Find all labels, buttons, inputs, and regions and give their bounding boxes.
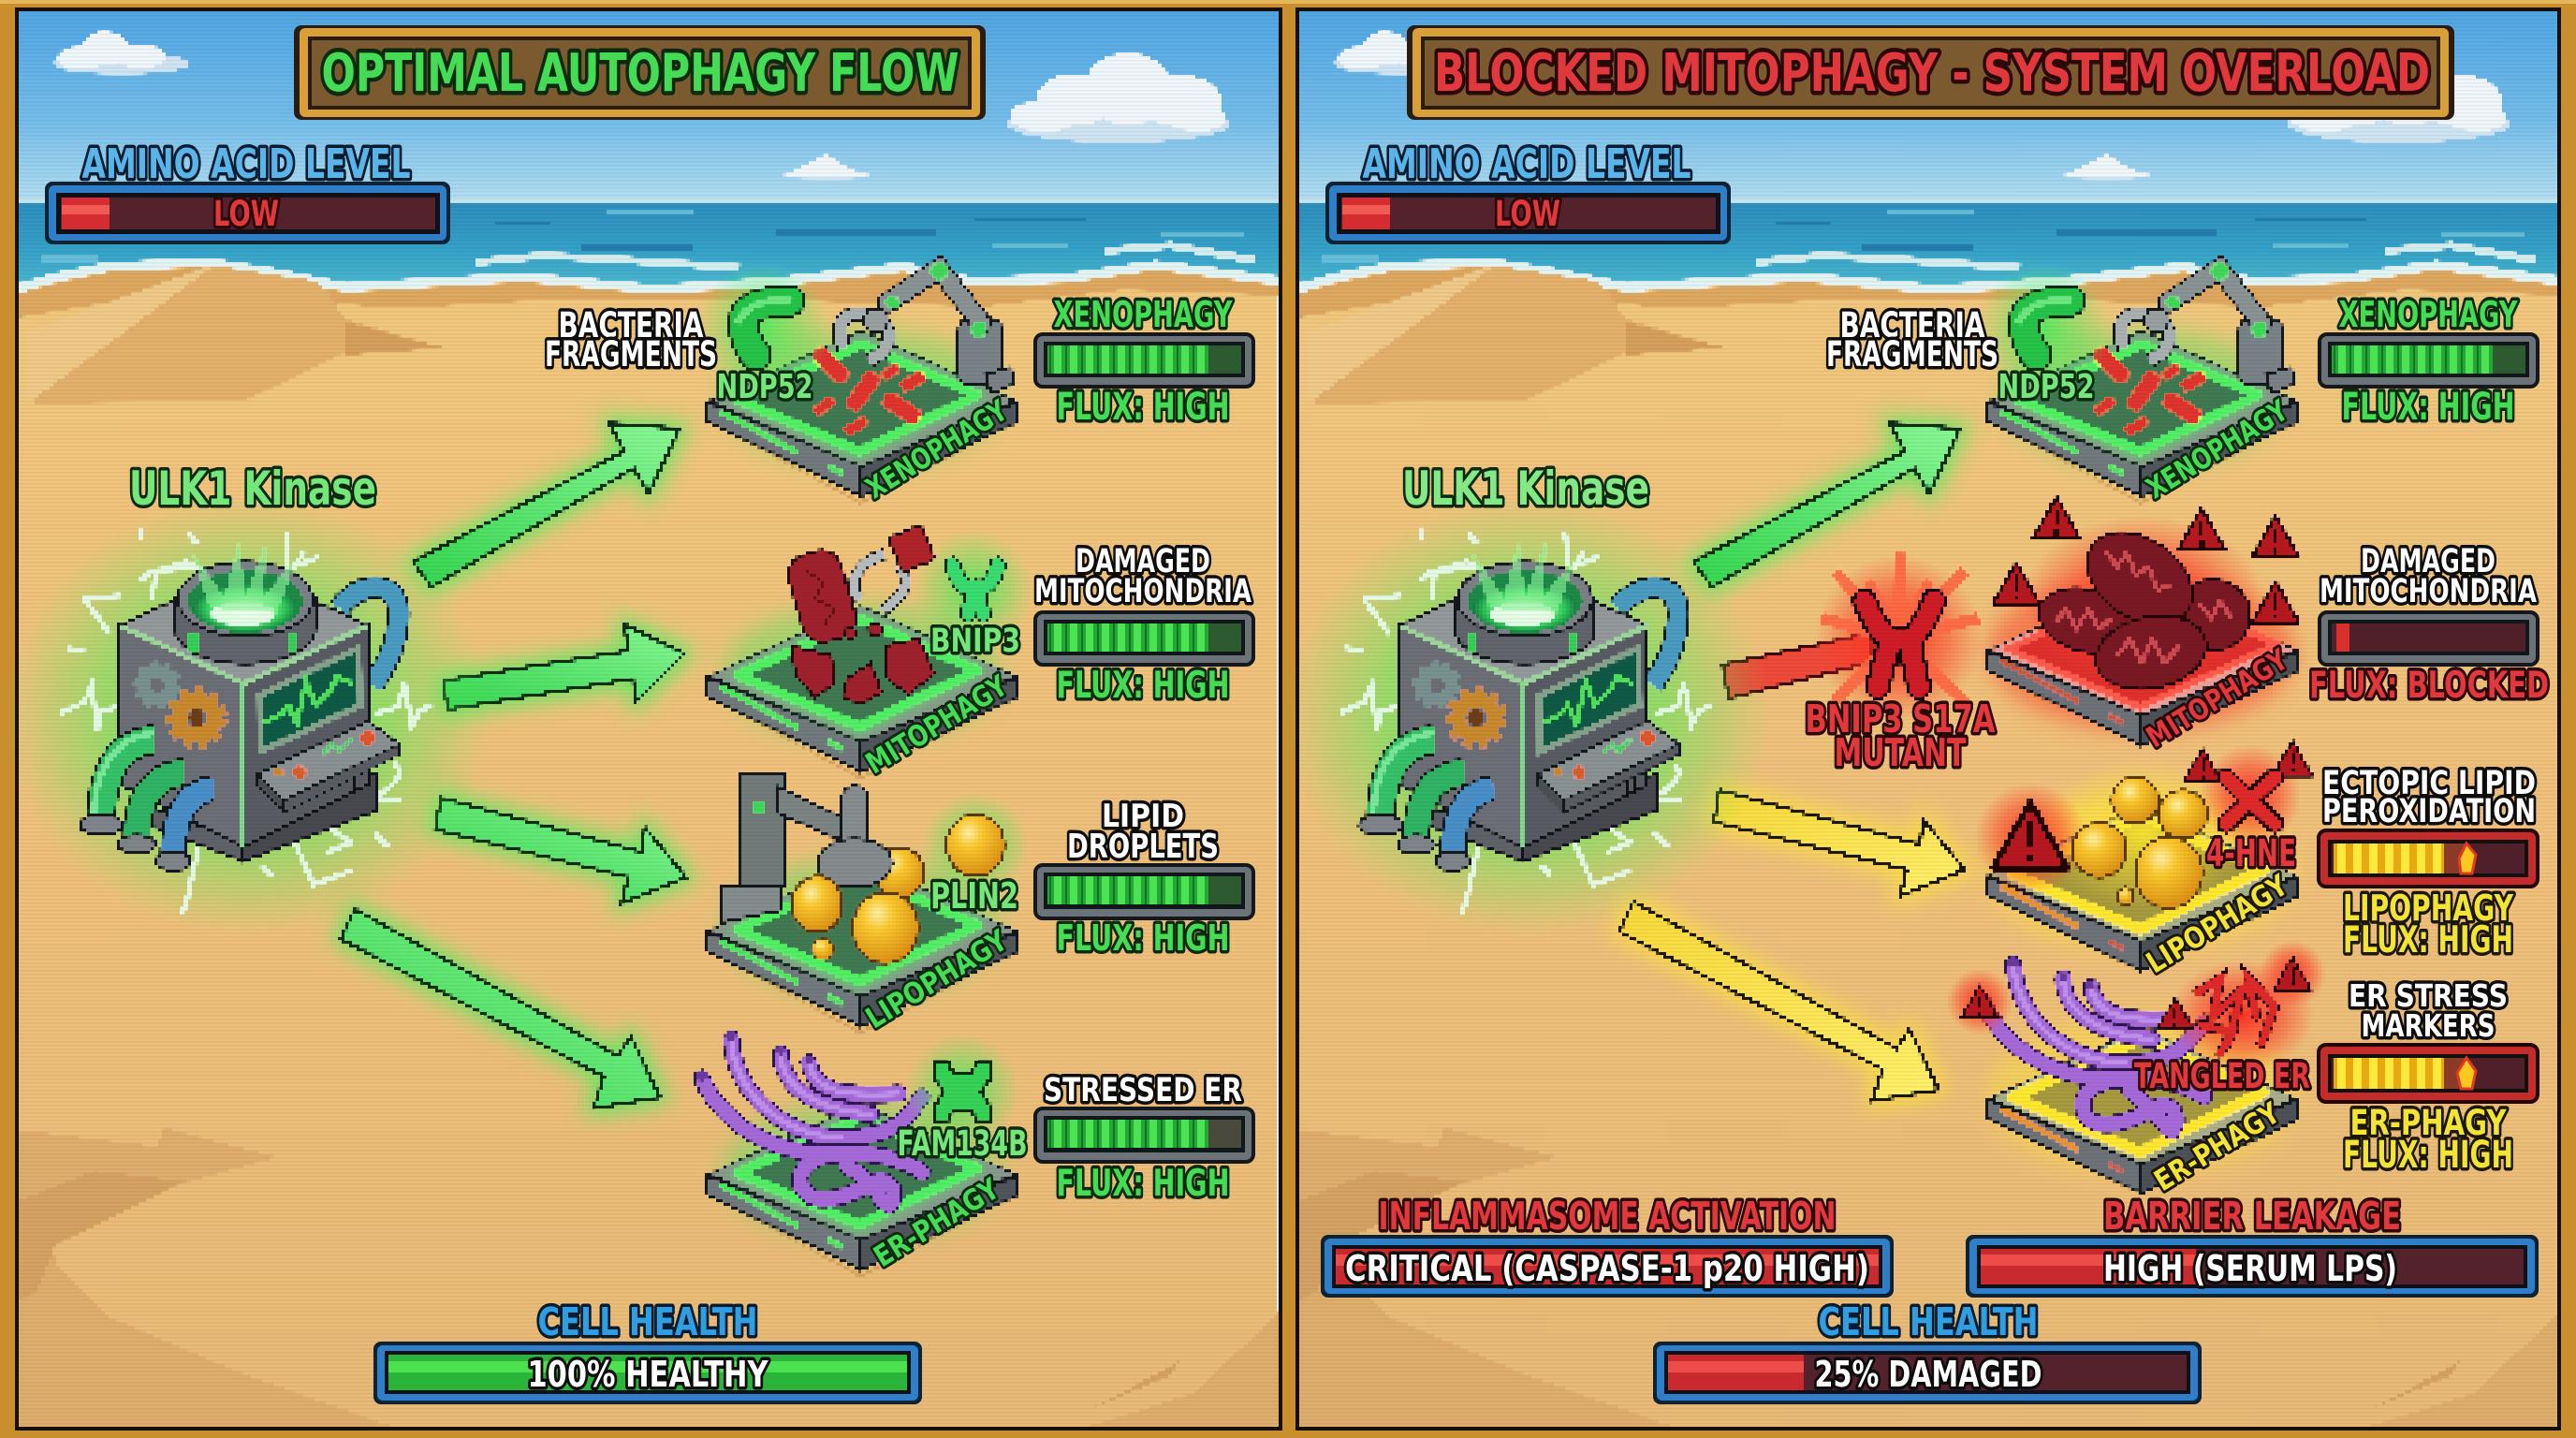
cell health xyxy=(1653,1299,2202,1404)
xenophagy labels: BACTERIA xyxy=(558,305,704,345)
xenophagy labels: FRAGMENTS xyxy=(1826,334,1998,374)
status: xenophagy: FLUX: HIGH xyxy=(1056,386,1230,429)
amino acid level: LOW xyxy=(213,194,279,234)
xenophagy labels xyxy=(1826,305,2294,506)
cell health: CELL HEALTH xyxy=(537,1299,758,1344)
status: mitophagy: DAMAGED xyxy=(1076,543,1210,580)
cell health: 25% DAMAGED xyxy=(1814,1354,2042,1395)
barrier leakage: BARRIER LEAKAGE xyxy=(2103,1194,2401,1239)
panel: blocked mitophagy xyxy=(1281,0,2561,1438)
mitophagy labels: BNIP3 xyxy=(930,623,1020,660)
amino acid level: AMINO ACID LEVEL xyxy=(1363,140,1690,188)
barrier leakage: HIGH (SERUM LPS) xyxy=(2103,1248,2397,1289)
status: er stress: ER-PHAGY xyxy=(2349,1103,2507,1143)
beach background left xyxy=(0,0,1281,1438)
right panel artwork xyxy=(1281,0,2561,1438)
lipophagy labels: LIPOPHAGY xyxy=(860,923,1014,1035)
ULK1 machine xyxy=(5,496,491,936)
status: er-phagy xyxy=(1035,1072,1253,1205)
xenophagy labels: NDP52 xyxy=(717,368,812,406)
lipophagy labels: PLIN2 xyxy=(930,875,1018,917)
status: er-phagy: FLUX: HIGH xyxy=(1056,1163,1230,1205)
xenophagy labels: XENOPHAGY xyxy=(860,393,1014,506)
barrier leakage xyxy=(1966,1194,2539,1298)
status: lipophagy: DROPLETS xyxy=(1067,828,1219,866)
lipophagy station xyxy=(1974,741,2312,971)
status: mitophagy blocked: DAMAGED xyxy=(2361,543,2496,580)
mitophagy station xyxy=(708,524,1034,781)
amino acid level xyxy=(1325,140,1731,244)
cell health: 100% HEALTHY xyxy=(528,1354,768,1395)
status: lipophagy xyxy=(1035,798,1253,959)
xenophagy labels: FRAGMENTS xyxy=(545,334,717,374)
status: er stress xyxy=(2319,977,2538,1177)
status: lipophagy: FLUX: HIGH xyxy=(1056,917,1230,959)
mitophagy station xyxy=(1987,497,2299,745)
title plaque: OPTIMAL AUTOPHAGY FLOW xyxy=(322,43,959,104)
amino acid level: AMINO ACID LEVEL xyxy=(82,140,410,188)
status: lipid peroxidation: FLUX: HIGH xyxy=(2343,919,2513,961)
amino acid level xyxy=(45,140,450,244)
bnip3 mutant labels: BNIP3 S17A xyxy=(1805,697,1996,741)
xenophagy labels: XENOPHAGY xyxy=(2141,393,2294,506)
bnip3 mutant xyxy=(1814,552,1983,723)
status: mitophagy: FLUX: HIGH xyxy=(1056,665,1230,707)
status: lipid peroxidation xyxy=(2319,765,2538,961)
er-phagy labels: ER-PHAGY xyxy=(868,1172,1006,1274)
inflammasome activation xyxy=(1321,1194,1894,1298)
xenophagy station xyxy=(1976,262,2299,506)
xenophagy labels: BACTERIA xyxy=(1840,305,1985,345)
er-phagy labels: TANGLED ER xyxy=(2134,1056,2310,1096)
ULK1 machine xyxy=(1284,496,1771,936)
title plaque xyxy=(294,25,986,120)
lipophagy labels: 4-HNE xyxy=(2206,832,2296,875)
status: xenophagy xyxy=(2320,294,2538,429)
er-phagy labels: ER-PHAGY xyxy=(2148,1096,2287,1198)
ULK1 label: ULK1 Kinase xyxy=(129,462,376,516)
status: mitophagy blocked xyxy=(2309,543,2549,707)
title plaque xyxy=(1407,25,2454,120)
lipophagy labels: LIPOPHAGY xyxy=(2141,868,2294,980)
er-phagy station xyxy=(1946,940,2326,1194)
xenophagy station xyxy=(695,262,1018,506)
beach background right xyxy=(1281,0,2561,1438)
status: lipid peroxidation: LIPOPHAGY xyxy=(2343,888,2513,929)
xenophagy labels: NDP52 xyxy=(1998,368,2095,406)
er-phagy labels: FAM134B xyxy=(897,1123,1028,1164)
status: xenophagy xyxy=(1035,294,1253,429)
inflammasome activation: INFLAMMASOME ACTIVATION xyxy=(1378,1194,1837,1239)
mitophagy labels: MITOPHAGY xyxy=(860,668,1014,781)
lipophagy station xyxy=(708,773,1030,1035)
ULK1 label: ULK1 Kinase xyxy=(1402,462,1649,516)
status: er-phagy: STRESSED ER xyxy=(1044,1072,1242,1109)
bnip3 mutant labels: MUTANT xyxy=(1835,730,1967,775)
status: er stress: ER STRESS xyxy=(2349,977,2508,1014)
status: xenophagy: XENOPHAGY xyxy=(1054,294,1233,335)
mitophagy label: MITOPHAGY xyxy=(2141,642,2294,755)
status: lipophagy: LIPID xyxy=(1102,798,1184,835)
arrows green xyxy=(341,423,686,1108)
panel: optimal autophagy flow xyxy=(0,0,1281,1438)
arrows xyxy=(1619,423,1965,1101)
amino acid level: LOW xyxy=(1495,194,1560,234)
left panel artwork xyxy=(0,0,1281,1438)
status: mitophagy xyxy=(1034,543,1253,707)
status: er stress: MARKERS xyxy=(2361,1007,2496,1044)
bnip3 mutant labels xyxy=(1805,697,1996,775)
status: mitophagy: MITOCHONDRIA xyxy=(1034,573,1251,610)
cell health: CELL HEALTH xyxy=(1818,1299,2039,1344)
inflammasome activation: CRITICAL (CASPASE-1 p20 HIGH) xyxy=(1345,1248,1869,1289)
er-phagy station xyxy=(696,1032,1020,1279)
xenophagy labels xyxy=(545,305,1014,506)
cell health xyxy=(373,1299,922,1404)
